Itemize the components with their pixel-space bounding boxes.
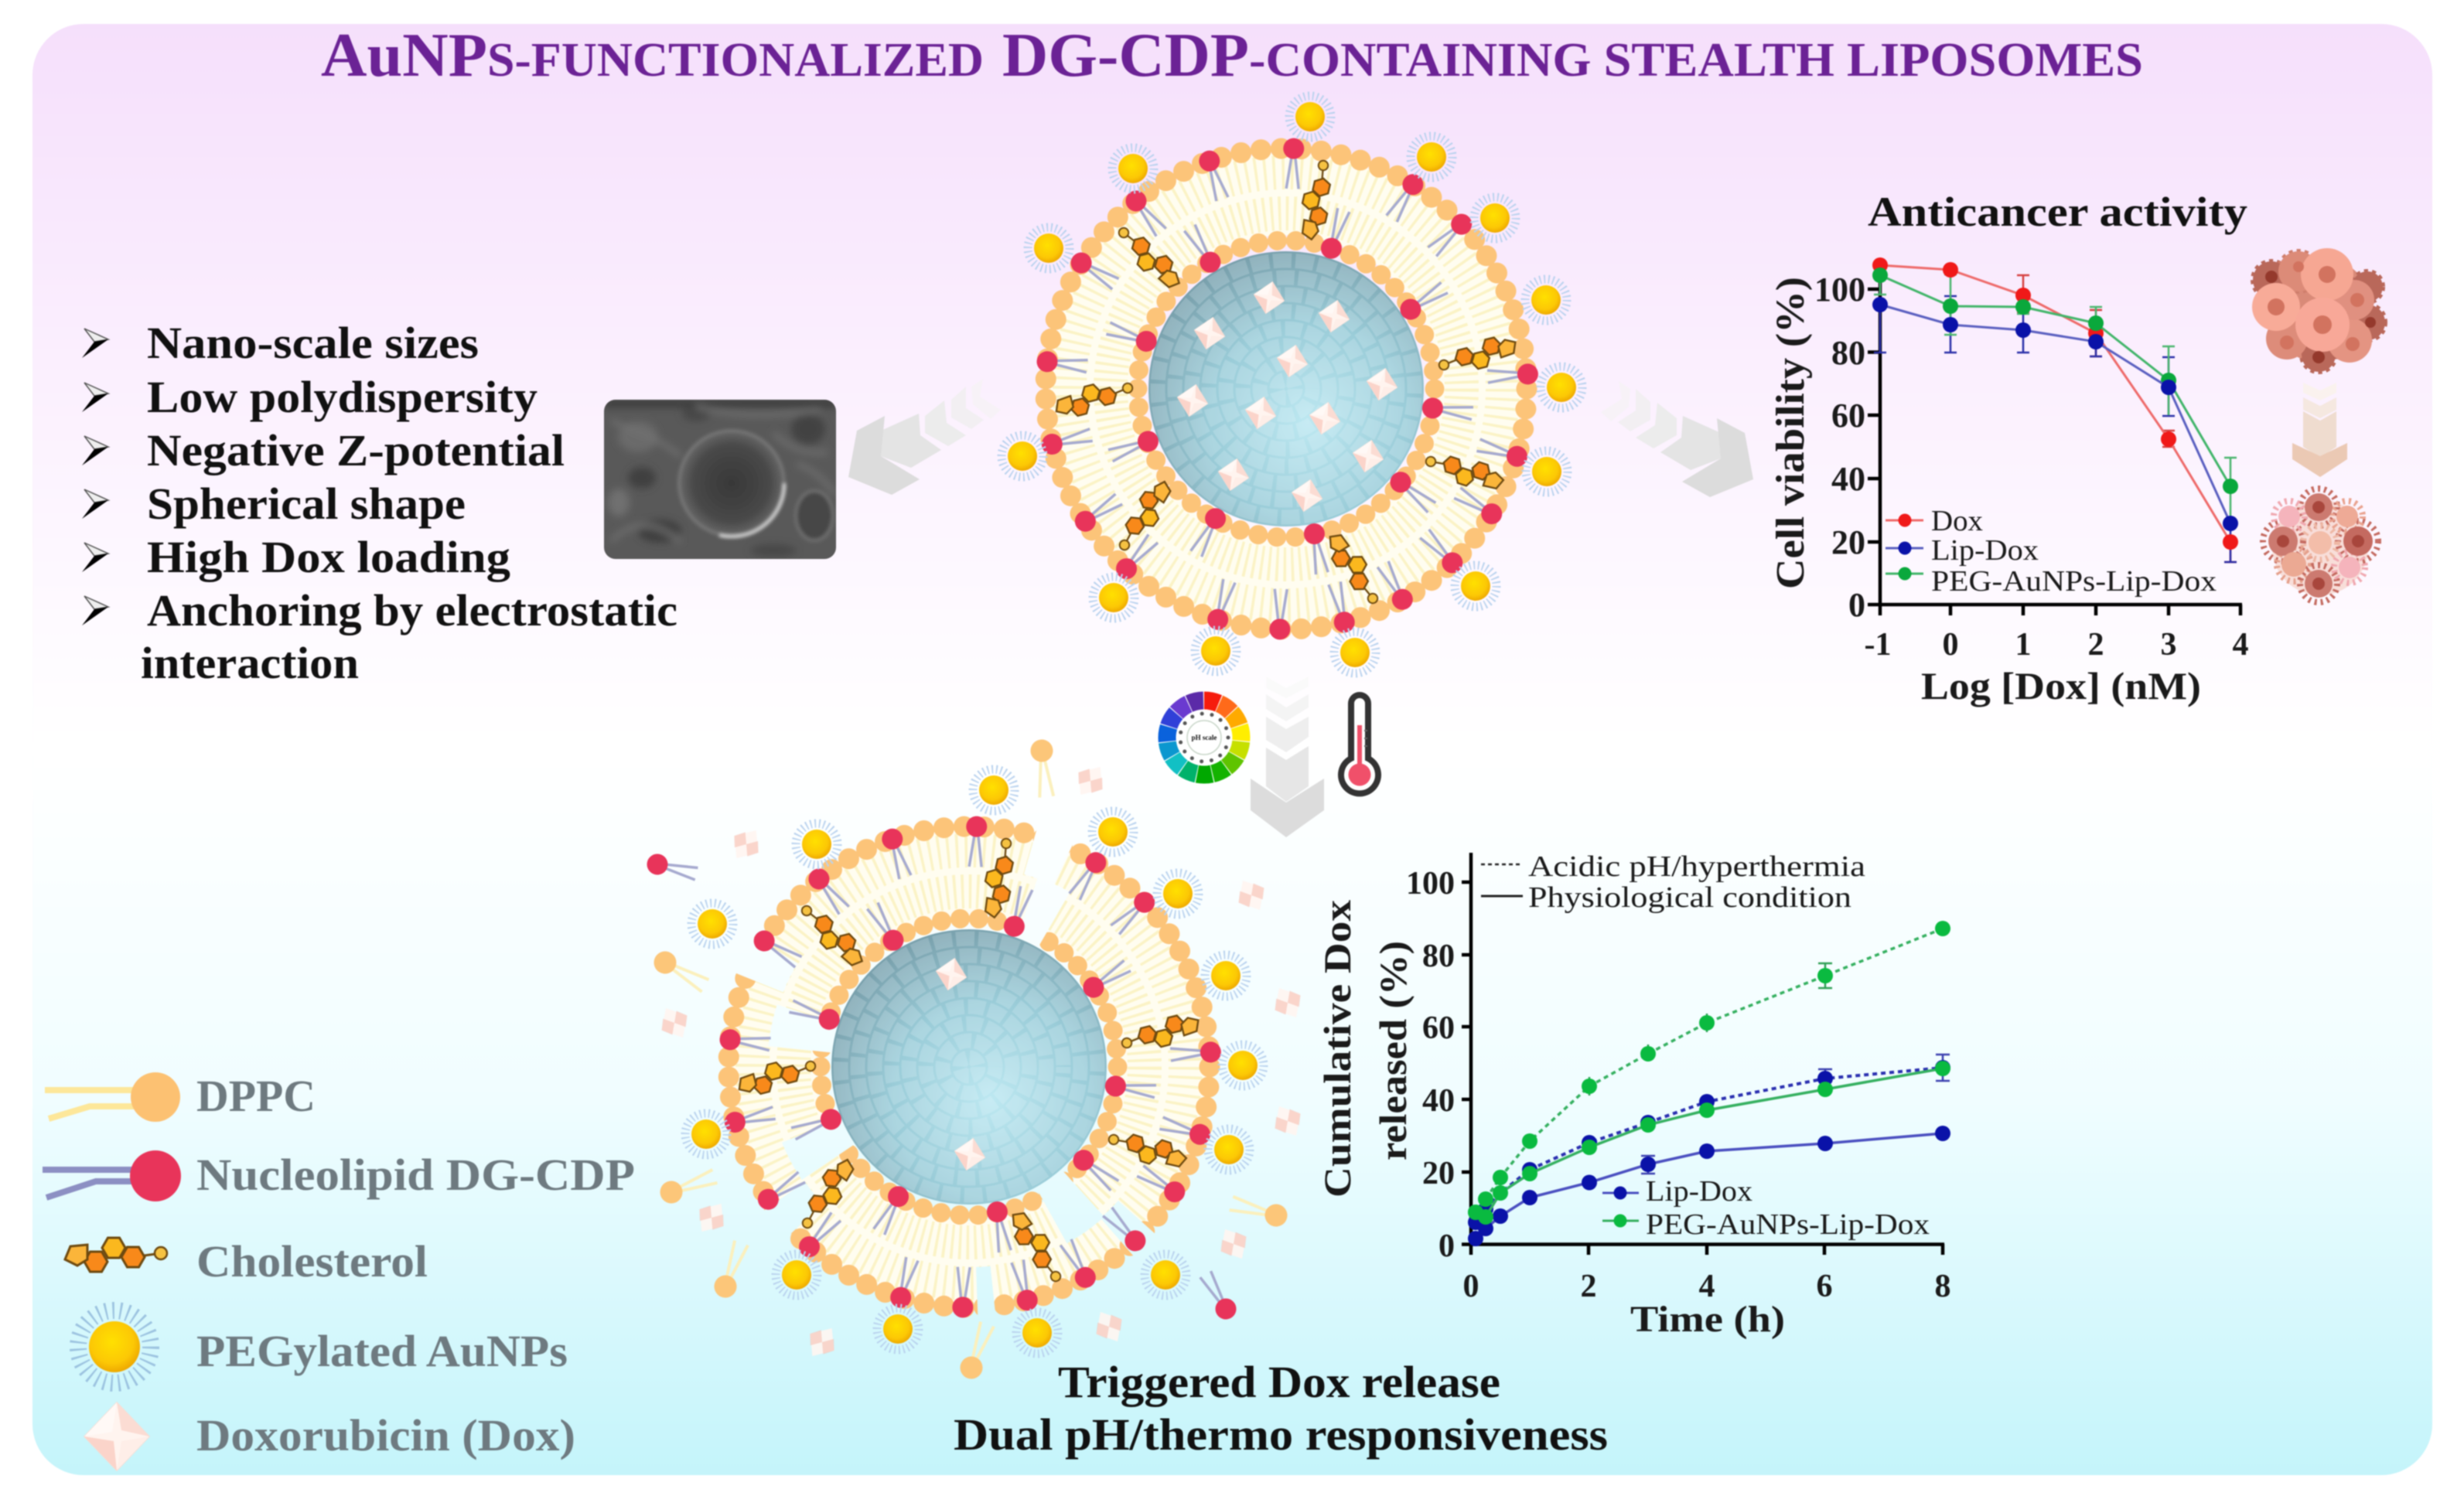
icon: thermometer: [1341, 695, 1378, 793]
disrupted liposome releasing doxorubicin: [645, 738, 1309, 1382]
chart legend: Lip-Dox: [1931, 534, 2039, 567]
title: DG-CDP: [1002, 22, 1249, 90]
x tick labels: [1463, 1269, 1950, 1304]
x tick labels: 0: [1463, 1269, 1479, 1304]
tick labels: 0: [1848, 586, 1865, 624]
x axis title: Time (h): [1630, 1299, 1785, 1340]
error bars: [1874, 274, 2237, 562]
properties bullet list: Nano-scale sizes: [147, 318, 479, 368]
title: AuNP: [321, 22, 487, 90]
tick labels: 80: [1831, 334, 1865, 372]
chart legend: PEG-AuNPs-Lip-Dox: [1931, 565, 2217, 598]
icon: dying cancer cells: [2263, 489, 2378, 602]
arrow: cancer cell death: [2292, 383, 2347, 477]
condition legend: Physiological condition: [1528, 881, 1851, 914]
caption: triggered release: Dual pH/thermo responsiveness: [954, 1409, 1608, 1460]
y axis title: released (%): [1371, 941, 1415, 1160]
legend: DPPC: DPPC: [196, 1071, 316, 1121]
error bars: [1589, 963, 1950, 1174]
legend: PEGylated AuNPs: [78, 1310, 568, 1383]
x tick labels: 0: [1943, 627, 1958, 663]
x tick labels: 4: [2232, 627, 2249, 663]
legend: nucleolipid DG-CDP: [43, 1150, 635, 1201]
title: S-FUNCTIONALIZED: [487, 34, 984, 87]
legend: DPPC: [45, 1071, 316, 1122]
series: PEG-AuNPs-Lip-Dox: [1872, 268, 2238, 494]
series: Lip-Dox: [1872, 297, 2238, 531]
legend: cholesterol: [65, 1236, 428, 1286]
formulation legend: Lip-Dox: [1646, 1175, 1752, 1208]
y tick labels: 60: [1422, 1010, 1455, 1046]
x tick labels: 6: [1816, 1269, 1833, 1304]
title: -CONTAINING STEALTH LIPOSOMES: [1249, 34, 2143, 87]
y axis title: Cumulative Dox: [1316, 900, 1359, 1198]
properties bullet list: interaction: [141, 638, 359, 688]
y tick labels: 100: [1406, 866, 1455, 901]
y tick labels: 40: [1422, 1083, 1455, 1119]
properties bullet list: Spherical shape: [147, 479, 466, 529]
remaining encapsulated crystals: [933, 955, 988, 1174]
x tick labels: 8: [1935, 1269, 1950, 1304]
arrow: downward to triggered release: [1251, 676, 1324, 837]
formulation legend: [1602, 1175, 1930, 1241]
line chart: cumulative Dox release: [1316, 850, 1950, 1340]
y axis title: Cell viability (%): [1769, 277, 1813, 589]
icon: pH colour wheel: [1152, 685, 1257, 790]
released lipids: [645, 738, 1290, 1382]
title: [321, 22, 2143, 90]
axes and ticks: [1868, 267, 2242, 615]
intact liposome: [1002, 96, 1582, 673]
tick labels: [1814, 271, 1865, 624]
x tick labels: 2: [2088, 627, 2104, 663]
legend: cholesterol: Cholesterol: [196, 1236, 428, 1286]
x tick labels: -1: [1864, 627, 1892, 663]
arrow: toward SEM image: [848, 379, 1001, 495]
tick labels: 60: [1831, 397, 1865, 434]
y tick labels: 80: [1422, 939, 1455, 974]
chart heading: anticancer activity: Anticancer activity: [1868, 189, 2247, 235]
line chart: cell viability: [1769, 257, 2249, 707]
caption: triggered release: [954, 1357, 1608, 1460]
legend: PEGylated AuNPs: PEGylated AuNPs: [196, 1326, 568, 1376]
properties bullet list: Negative Z-potential: [147, 425, 565, 475]
released doxorubicin crystals: [654, 758, 1309, 1365]
arrow: toward anticancer chart: [1601, 381, 1753, 497]
axes and ticks: [1462, 853, 1944, 1255]
legend: doxorubicin: [84, 1402, 575, 1470]
encapsulated doxorubicin crystals: [1174, 278, 1401, 515]
x tick labels: 1: [2015, 627, 2031, 663]
component legend: [43, 1071, 635, 1470]
x tick labels: [1864, 627, 2249, 663]
y axis title: [1316, 900, 1415, 1198]
legend: nucleolipid DG-CDP: Nucleolipid DG-CDP: [196, 1150, 635, 1200]
formulation legend: PEG-AuNPs-Lip-Dox: [1646, 1208, 1930, 1241]
series: PEG-AuNPs-Lip-Dox physiological: [1468, 1061, 1950, 1225]
tick labels: 100: [1814, 271, 1865, 308]
series: Lip-Dox acidic: [1468, 1060, 1950, 1230]
properties bullet list: Anchoring by electrostatic: [147, 585, 677, 636]
icon: cancer cell cluster: [2252, 248, 2385, 372]
x tick labels: 2: [1581, 1269, 1596, 1304]
condition legend: [1481, 850, 1865, 914]
x tick labels: 3: [2161, 627, 2176, 663]
properties bullet list: High Dox loading: [147, 532, 510, 582]
SEM micrograph of liposome: [604, 400, 836, 559]
tick labels: 20: [1831, 523, 1865, 561]
series: Dox: [1872, 257, 2238, 550]
chart legend: Dox: [1931, 505, 1983, 537]
tick labels: 40: [1831, 460, 1865, 498]
series: Lip-Dox physiological: [1468, 1126, 1950, 1246]
x axis title: Log [Dox] (nM): [1921, 664, 2201, 707]
y tick labels: 20: [1422, 1156, 1455, 1191]
properties bullet list: Low polydispersity: [147, 372, 538, 422]
PEGylated gold nanoparticles: [1002, 96, 1582, 673]
x tick labels: 4: [1698, 1269, 1715, 1304]
legend: doxorubicin: Doxorubicin (Dox): [196, 1410, 575, 1460]
icon: pH colour wheel: pH scale: [1192, 734, 1217, 741]
chart legend: [1886, 505, 2217, 598]
y tick labels: [1406, 866, 1455, 1264]
series: PEG-AuNPs-Lip-Dox acidic: [1468, 921, 1950, 1220]
y tick labels: 0: [1438, 1228, 1455, 1264]
condition legend: Acidic pH/hyperthermia: [1528, 850, 1865, 883]
caption: triggered release: Triggered Dox release: [1058, 1357, 1500, 1407]
properties bullet list: [82, 318, 677, 688]
detached gold nanoparticles: [685, 769, 1264, 1354]
